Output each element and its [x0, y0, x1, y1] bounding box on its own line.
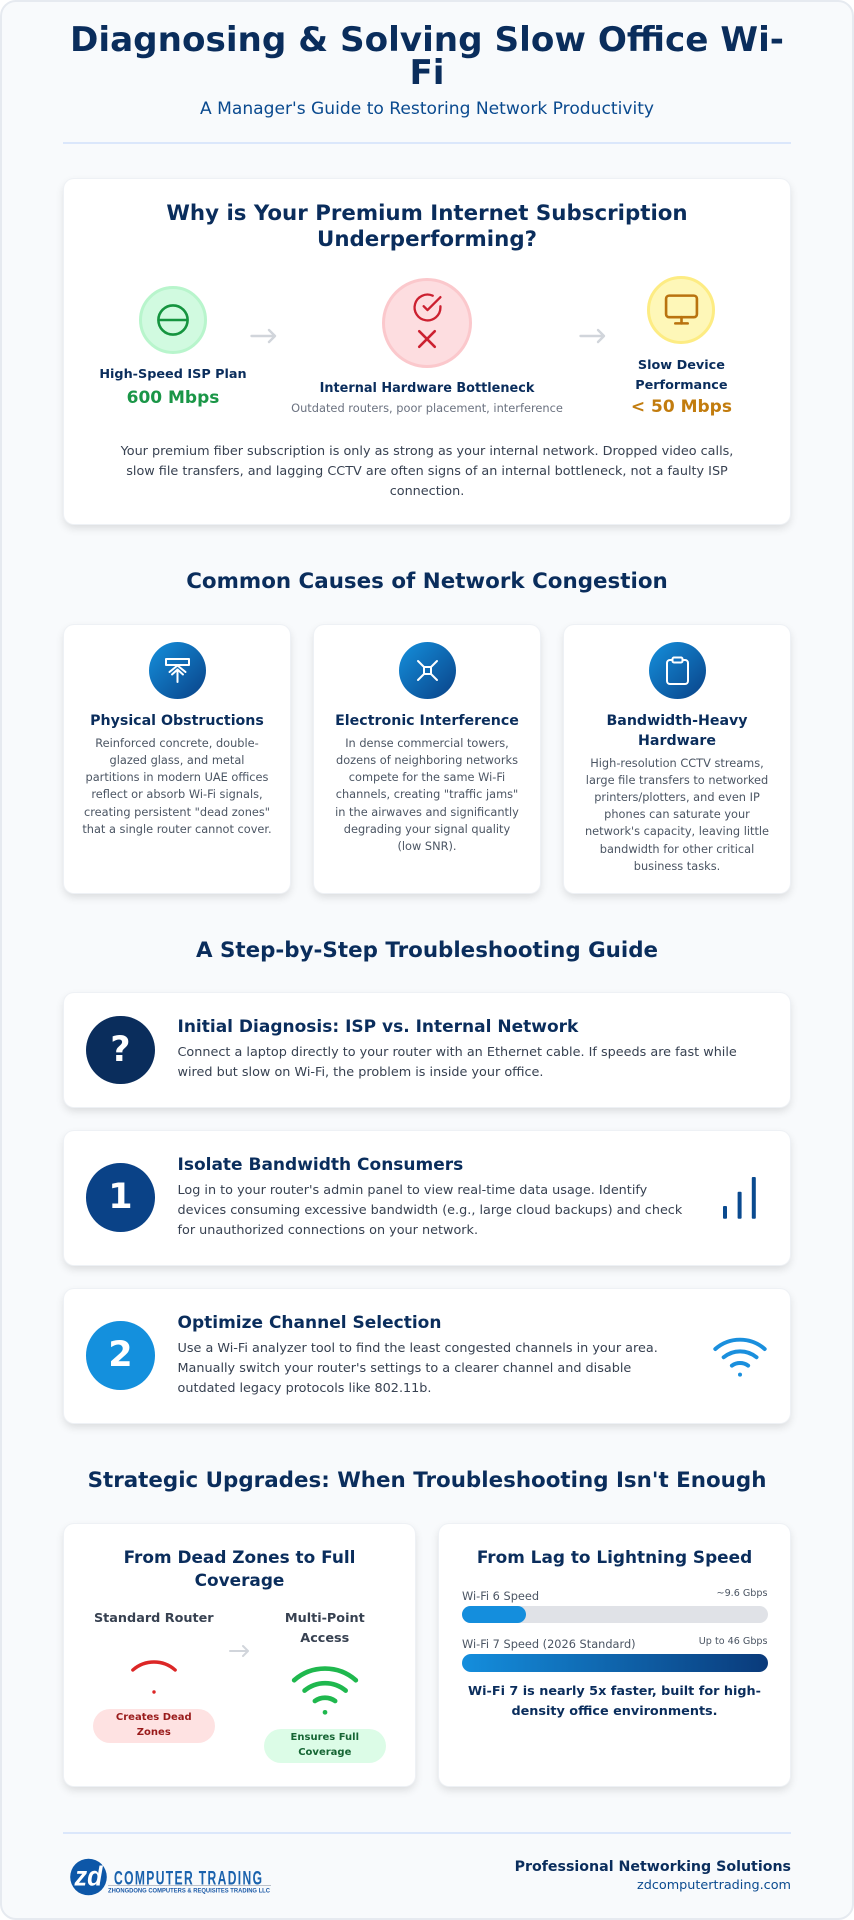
- heading: common causes: Common Causes of Network Congestion: [186, 569, 668, 594]
- card text: partitions in modern UAE offices: [86, 770, 268, 784]
- step badge: 1: 1: [108, 1177, 133, 1217]
- step text: Log in to your router's admin panel to view real-time data usage. Identify: [178, 1183, 647, 1198]
- column label: [285, 1611, 365, 1646]
- card text: [82, 736, 272, 836]
- logo: ZD Computer Trading: ZHONGDONG COMPUTERS & REQUISITES TRADING LLC: [108, 1889, 271, 1895]
- step text: Use a Wi-Fi analyzer tool to find the least congested channels in your area.: [178, 1341, 658, 1356]
- card title: [606, 713, 748, 749]
- step text: [178, 1045, 737, 1080]
- badge: ensures full coverage: [264, 1729, 386, 1763]
- value: 600 Mbps: 600 Mbps: [127, 388, 219, 408]
- step text: wired but slow on Wi-Fi, the problem is inside your office.: [178, 1065, 544, 1080]
- footer tagline: Professional Networking Solutions: [515, 1859, 791, 1875]
- panel heading: [166, 200, 688, 252]
- badge: creates dead zones: Zones: [137, 1727, 171, 1738]
- chart label: wifi 7: Wi-Fi 7 Speed (2026 Standard): [462, 1637, 636, 1651]
- icon: obstruction: [148, 642, 206, 698]
- chart label: wifi 6: Wi-Fi 6 Speed: [462, 1588, 539, 1602]
- title: Diagnosing & Solving Slow Office Wi-: [70, 20, 784, 60]
- column label: Multi-Point: [285, 1611, 365, 1626]
- card title: Physical Obstructions: [90, 713, 264, 729]
- card text: bandwidth for other critical: [600, 842, 754, 856]
- takeaway text: [468, 1684, 761, 1719]
- logo: ZD Computer Trading: zd: [74, 1861, 103, 1892]
- step title: Optimize Channel Selection: [178, 1313, 441, 1333]
- card text: business tasks.: [634, 859, 720, 873]
- subtitle: A Manager's Guide to Restoring Network Productivity: [200, 98, 654, 118]
- icon: strong wifi: [292, 1666, 358, 1715]
- panel: step 1: [64, 1131, 790, 1265]
- badge: ensures full coverage: Ensures Full: [291, 1732, 359, 1743]
- icon: signal bars: [723, 1177, 756, 1219]
- panel: bandwidth-heavy hardware: [564, 625, 790, 892]
- card text: compete for the same Wi-Fi: [349, 770, 505, 784]
- panel: why is your premium internet subscription underperforming: [64, 179, 790, 524]
- panel: step 2: [64, 1289, 790, 1423]
- panel heading: Underperforming?: [317, 226, 537, 252]
- panel heading: Why is Your Premium Internet Subscription: [166, 200, 688, 226]
- card text: printers/plotters, and even IP: [594, 790, 760, 804]
- card title: Electronic Interference: [335, 713, 519, 729]
- panel: electronic interference: [314, 625, 540, 892]
- explanation text: Your premium fiber subscription is only as strong as your internal network. Dropped video calls,: [121, 444, 733, 458]
- label: internal hardware bottleneck: Internal Hardware Bottleneck: [320, 381, 534, 396]
- card text: creating persistent "dead zones": [84, 805, 270, 819]
- arrow: [579, 328, 606, 344]
- chart value: wifi 6: ~9.6 Gbps: [717, 1588, 768, 1599]
- chart value: wifi 7: Up to 46 Gbps: [699, 1636, 768, 1647]
- icon: red circle badge: [382, 278, 472, 368]
- icon: cross: [418, 330, 436, 348]
- icon: weak wifi: [131, 1660, 177, 1694]
- card text: large file transfers to networked: [586, 773, 768, 787]
- panel heading: From Lag to Lightning Speed: [477, 1547, 752, 1567]
- flow step: ISP plan: [99, 286, 247, 408]
- value: under 50 Mbps: < 50 Mbps: [631, 397, 732, 417]
- card text: channels, creating "traffic jams": [336, 787, 518, 801]
- takeaway text: Wi-Fi 7 is nearly 5x faster, built for high-: [468, 1684, 761, 1699]
- heading: troubleshooting guide: A Step-by-Step Troubleshooting Guide: [196, 938, 658, 963]
- card text: In dense commercial towers,: [345, 736, 509, 750]
- step text: Manually switch your router's settings to a clearer channel and disable: [178, 1361, 631, 1376]
- footer website: zdcomputertrading.com: [637, 1878, 791, 1893]
- panel: physical obstructions: [64, 625, 290, 892]
- label: slow device performance: [635, 358, 728, 393]
- column: multi-point access: [264, 1611, 386, 1763]
- label: high-speed ISP plan: High-Speed ISP Plan: [99, 367, 247, 382]
- card text: Reinforced concrete, double-: [95, 736, 259, 750]
- card text: degrading your signal quality: [344, 822, 510, 836]
- step text: outdated legacy protocols like 802.11b.: [178, 1381, 431, 1396]
- icon: green circle badge: [139, 286, 207, 354]
- panel heading: [124, 1547, 355, 1590]
- label: slow device performance: Performance: [635, 378, 728, 393]
- step text: Connect a laptop directly to your router with an Ethernet cable. If speeds are fast while: [178, 1045, 737, 1060]
- badge: ensures full coverage: Coverage: [298, 1747, 351, 1758]
- column label: Access: [300, 1631, 349, 1646]
- step text: for unauthorized connections on your network.: [178, 1223, 478, 1238]
- panel: lag to lightning speed: [439, 1524, 790, 1786]
- card title: Bandwidth-Heavy: [606, 713, 748, 729]
- card text: phones can saturate your: [604, 807, 750, 821]
- arrow: [250, 328, 276, 344]
- title: [70, 20, 784, 92]
- card text: in the airwaves and significantly: [335, 805, 519, 819]
- footer: company info: [515, 1859, 791, 1893]
- panel heading: From Dead Zones to Full: [124, 1547, 355, 1567]
- takeaway text: density office environments.: [511, 1704, 718, 1719]
- logo: ZD Computer Trading: [70, 1858, 271, 1896]
- card text: dozens of neighboring networks: [336, 753, 518, 767]
- sublabel: Outdated routers, poor placement, interference: [291, 401, 563, 415]
- explanation text: [120, 444, 733, 498]
- badge: creates dead zones: [93, 1709, 215, 1743]
- step text: [178, 1183, 682, 1238]
- panel: dead zones to full coverage: [64, 1524, 415, 1786]
- flow step: internal hardware bottleneck: [291, 278, 563, 415]
- card text: that a single router cannot cover.: [82, 822, 272, 836]
- panel heading: Coverage: [195, 1570, 284, 1590]
- card text: High-resolution CCTV streams,: [590, 756, 764, 770]
- step text: [178, 1341, 658, 1396]
- step badge: question mark: ?: [110, 1030, 131, 1070]
- step badge: 2: 2: [108, 1335, 133, 1375]
- label: slow device performance: Slow Device: [638, 358, 725, 373]
- step title: Initial Diagnosis: ISP vs. Internal Network: [178, 1017, 578, 1037]
- card title: Hardware: [638, 733, 716, 749]
- step badge: question mark: [86, 1016, 155, 1084]
- card text: network's capacity, leaving little: [585, 824, 769, 838]
- column label: Standard Router: [94, 1611, 214, 1626]
- step title: Isolate Bandwidth Consumers: [178, 1155, 463, 1175]
- card text: [585, 756, 769, 873]
- title: Fi: [409, 52, 445, 92]
- step badge: 2: [86, 1321, 155, 1390]
- icon: interference: [398, 642, 456, 698]
- flow step: slow device performance: [631, 276, 732, 417]
- badge: creates dead zones: Creates Dead: [116, 1712, 192, 1723]
- icon: wifi: [713, 1338, 767, 1377]
- explanation text: slow file transfers, and lagging CCTV are often signs of an internal bottleneck, not a faulty ISP: [126, 464, 728, 478]
- bar: wifi 7: [462, 1654, 768, 1672]
- step text: devices consuming excessive bandwidth (e.g., large cloud backups) and check: [178, 1203, 682, 1218]
- icon: yellow monitor badge: [647, 276, 715, 344]
- logo: ZD Computer Trading: COMPUTER TRADING: [114, 1868, 262, 1890]
- heading: strategic upgrades: Strategic Upgrades: When Troubleshooting Isn't Enough: [88, 1468, 766, 1493]
- icon: check circle: [413, 293, 442, 322]
- arrow: [229, 1645, 249, 1657]
- card text: reflect or absorb Wi-Fi signals,: [91, 787, 263, 801]
- explanation text: connection.: [390, 484, 464, 498]
- card text: [335, 736, 519, 853]
- bar: wifi 6: [462, 1606, 768, 1623]
- card text: glazed glass, and metal: [110, 753, 244, 767]
- panel: step initial diagnosis: [64, 993, 790, 1107]
- column: standard router: [93, 1611, 215, 1743]
- icon: clipboard: [648, 642, 706, 698]
- card text: (low SNR).: [397, 839, 456, 853]
- step badge: 1: [86, 1163, 155, 1232]
